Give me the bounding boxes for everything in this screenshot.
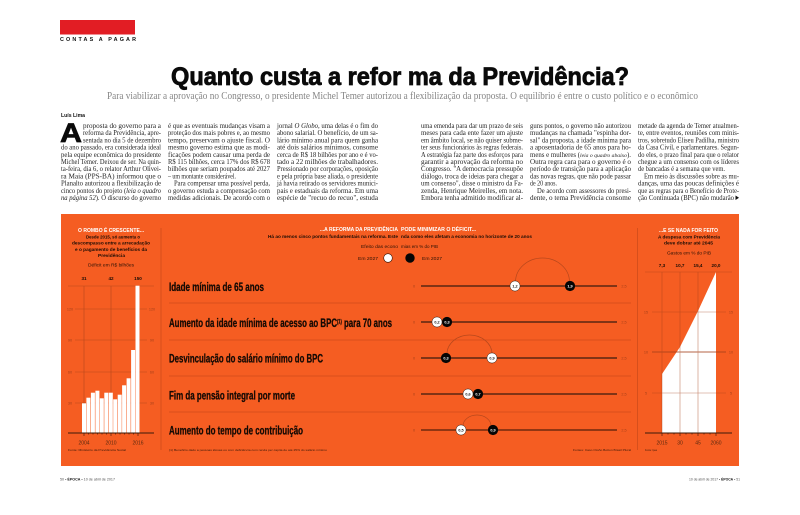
text column 4: garantir a aprovação da reforma no	[421, 159, 524, 166]
text column 5: De acordo com assessores do presi-	[537, 188, 632, 195]
spending heading: ...E SE NADA FOR FEITO	[659, 228, 718, 234]
deficit heading: Déficit em R$ bilhões	[88, 262, 135, 267]
row: BPC idade: 0	[413, 320, 415, 324]
deficit axis numbers: 90	[68, 338, 72, 342]
deficit year labels: 2016	[132, 440, 144, 446]
spending axis numbers	[644, 310, 733, 396]
spending value labels: 20,0	[712, 263, 721, 268]
spending axis numbers: 15	[644, 310, 648, 314]
text column 5: das novas regras, que não pode passar	[530, 173, 632, 180]
spending source: Fonte: Ipea	[645, 448, 657, 452]
row: pensão: 2,5	[621, 392, 627, 396]
text column 2: mesmo governo estima que as modi-	[168, 145, 271, 152]
panel: reform heading	[268, 225, 532, 249]
deficit year labels: 2010	[105, 440, 117, 446]
deficit axis numbers: 120	[149, 308, 155, 312]
text column 2	[167, 123, 271, 202]
text column 1: do ano passado, era considerada ideal	[61, 145, 161, 152]
spending heading: Gastos em % do PIB	[667, 250, 711, 255]
row: contribuição: 2,5	[621, 428, 627, 432]
text column 5: período de transição para a aplicação	[530, 166, 632, 173]
row: desvinculação	[169, 335, 627, 366]
spending year labels	[656, 440, 722, 446]
panel: reform heading: ...A REFORMA DA PREVIDÊNCIA	[320, 225, 398, 233]
row: pensão: 0,6	[465, 392, 471, 396]
row: BPC idade: 0,2	[434, 320, 440, 324]
title: Quanto custa a refor ma da Previdência?	[171, 63, 629, 91]
text column 6: do eles, o prazo final para que o relator	[638, 152, 740, 159]
deficit heading: descompasso entre a arrecadação	[72, 240, 150, 246]
text column 3: jornal O Globo, uma delas é o fim do	[276, 123, 379, 130]
text column 5	[530, 123, 632, 202]
row: pensão	[169, 388, 627, 402]
row: contribuição: 0,9	[490, 428, 496, 432]
text column 5: mudanças na chamada "espinha dor-	[530, 130, 632, 137]
panel: reform heading: Há ao menos cinco pontos fundamentais na reforma. Este	[268, 234, 398, 239]
row: desvinculação: 0,3	[443, 356, 449, 360]
text column 6: que as regras para o Benefício de Prote-	[638, 188, 740, 195]
spending value labels	[659, 263, 721, 268]
text column 1: reforma da Previdência, apre-	[83, 130, 162, 137]
text column 4: ter seus funcionários às regras federais.	[421, 145, 523, 152]
deficit grid	[68, 286, 154, 433]
text column 3: tado a 22 milhões de trabalhadores.	[277, 159, 378, 166]
panel: reform heading: nda como eles afetam a economia no horizonte de 20 anos	[401, 234, 532, 239]
spending year labels: 30	[677, 440, 683, 446]
text column 4: em âmbito local, se não quiser subme-	[421, 137, 524, 144]
text column 5: a aposentadoria de 65 anos para ho-	[530, 145, 632, 152]
spending axis numbers: 10	[644, 350, 648, 354]
text column 4: diálogo, troca de ideias para chegar a	[421, 173, 523, 180]
text column 1: proposta do governo para a	[83, 123, 161, 130]
text column 3	[276, 123, 379, 202]
text column 2: o governo estuda a compensação com	[168, 188, 271, 195]
footer right: 10 de abril de 2017 • ÉPOCA • 51	[689, 476, 741, 482]
spending axis numbers: 5	[730, 392, 732, 396]
text column 2: é que as eventuais mudanças visam a	[168, 123, 270, 130]
text column 5: sal" da proposta, a idade mínima para	[530, 137, 631, 144]
deficit year labels	[78, 440, 144, 446]
row: BPC idade: 2,5	[621, 320, 627, 324]
text column 6: te, entre eventos, reuniões com minis-	[638, 130, 740, 137]
subtitle: Para viabilizar a aprovação no Congresso, o presidente Michel Temer autorizou a flexibilização da proposta. O equilíbrio é entre o custo político e o econômico	[107, 91, 698, 102]
row: idade mínima: 1,2	[512, 284, 518, 288]
spending year labels: 45	[695, 440, 701, 446]
row separators	[169, 303, 631, 412]
text column 2: bilhões que seriam poupados até 2027	[168, 166, 271, 173]
text column 2: medidas adicionais. De acordo com o	[168, 195, 271, 202]
row: contribuição: 0,5	[458, 428, 464, 432]
spending axis numbers: 5	[645, 392, 647, 396]
text column 2: proteção dos mais pobres e, ao mesmo	[168, 130, 271, 137]
panel: deficit chart	[67, 226, 155, 452]
deficit baseline and ticks	[68, 433, 154, 436]
panel: reform heading: PODE MINIMIZAR O DÉFICIT...	[401, 225, 477, 233]
text column 4: zenda, Henrique Meirelles, em nota.	[421, 188, 523, 195]
row: contribuição: Aumento do tempo de contribuição	[169, 424, 303, 438]
row: BPC idade: 0,3	[444, 320, 450, 324]
footnote: (1) Benefício dado a pessoas idosas ou com deficiência com renda per capita de até 25% do salário mínimo	[169, 448, 327, 452]
text column 6: tros, sobretudo Eliseu Padilha, ministro	[638, 137, 740, 144]
deficit axis numbers: 60	[68, 370, 72, 374]
deficit axis numbers: 120	[67, 308, 73, 312]
text column 6: chegue a um consenso com os líderes	[638, 159, 739, 166]
spending year labels: 2060	[710, 440, 722, 446]
row: BPC idade: para 70 anos	[342, 316, 392, 330]
row: desvinculação: 0,9	[489, 356, 495, 360]
text column 5: guns pontos, o governo não autorizou	[530, 123, 632, 130]
panel: reform heading: Efeito das econo	[361, 244, 399, 249]
text column 3: já havia retirado os servidores munici-	[276, 181, 379, 188]
spending axis numbers: 10	[729, 350, 733, 354]
deficit source: Fonte: Ministério da Previdência Social	[68, 448, 126, 452]
row: BPC idade: (1)	[337, 320, 342, 326]
spending year labels: 2015	[656, 440, 668, 446]
text column 2: tempo, preservam o ajuste fiscal. O	[168, 137, 270, 144]
spending grid	[645, 272, 732, 433]
text column 4: meses para cada ente fazer um ajuste	[421, 130, 523, 137]
row: BPC idade: Aumento da idade mínima de acesso ao BPC	[169, 316, 426, 330]
text column 3: pais e estaduais da reforma. Em uma	[277, 188, 378, 195]
text column 1: Michel Temer. Deixou de ser. Na quin-	[61, 159, 162, 166]
text column 2: – um montante considerável.	[167, 173, 236, 180]
text column 1: Planalto autorizou a flexibilização de	[61, 181, 161, 188]
spending baseline and ticks	[645, 433, 732, 436]
text column 2: R$ 115 bilhões, cerca 17% dos R$ 678	[168, 159, 271, 166]
section tag: contas a pagar	[60, 20, 136, 43]
spending value labels: 7,3	[659, 263, 666, 268]
row: idade mínima: 2,5	[621, 284, 627, 288]
spending heading: deve dobrar até 2045	[664, 240, 713, 246]
divider right	[636, 228, 638, 450]
text column 4: Congresso. "A democracia pressupõe	[421, 166, 523, 173]
text column 4: uma emenda para dar um prazo de seis	[421, 123, 523, 130]
spending value labels: 10,7	[676, 263, 685, 268]
text column 6: metade da agenda de Temer atualmen-	[638, 123, 740, 130]
deficit axis numbers: 30	[68, 402, 72, 406]
text column 6: ção Continuada (BPC) não mudarão	[638, 195, 735, 202]
text column 6: Em meio às discussões sobre as mu-	[644, 173, 740, 180]
text column 4	[421, 123, 524, 202]
text column 1	[61, 123, 162, 202]
text column 3: e pela própria base aliada, o presidente	[277, 173, 378, 180]
text column 3: Pressionado por corporações, oposição	[277, 166, 379, 173]
text column 1: sentada no dia 5 de dezembro	[83, 137, 162, 144]
text column 3: cerca de R$ 18 bilhões por ano e é vo-	[277, 152, 379, 159]
deficit heading	[72, 226, 150, 267]
footer left: 50 • ÉPOCA • 10 de abril de 2017	[60, 476, 116, 482]
deficit value labels	[81, 276, 142, 281]
panel: orange infographic background	[61, 214, 739, 466]
row: BPC idade	[169, 316, 627, 330]
text column 4: Embora tenha admitido modificar al-	[421, 195, 524, 202]
deficit axis numbers: 30	[150, 402, 154, 406]
text column 3: lário mínimo anual para quem ganha	[277, 137, 378, 144]
text column 1: cinco pontos do projeto (leia o quadro	[61, 188, 162, 195]
text column 3: espécie de "recuo do recuo", estuda	[277, 195, 378, 202]
row: idade mínima	[169, 258, 627, 294]
text column 5: de 20 anos.	[530, 181, 557, 188]
spending heading	[658, 228, 720, 255]
text column 2: Para compensar uma possível perda,	[174, 181, 270, 188]
text column 5: mens e mulheres (leia o quadro abaixo).	[530, 152, 631, 159]
row: pensão: Fim da pensão integral por morte	[169, 388, 295, 402]
deficit value labels: 150	[134, 276, 142, 281]
text column 3: abono salarial. O benefício, de um sa-	[277, 130, 379, 137]
text column 5: Outra regra cara para o governo é o	[530, 159, 632, 166]
text column 2: ficações podem causar uma perda de	[168, 152, 270, 159]
deficit heading: Previdência	[98, 253, 125, 258]
text column 4: A estratégia faz parte dos esforços para	[421, 152, 523, 159]
spending value labels: 15,4	[694, 263, 703, 268]
deficit axis numbers: 90	[150, 338, 154, 342]
spending heading: A despesa com Previdência	[658, 234, 720, 239]
row: pensão: 0	[413, 392, 415, 396]
deficit axis numbers	[67, 308, 155, 406]
divider left	[160, 228, 162, 450]
deficit heading: e o pagamento de benefícios da	[75, 247, 147, 252]
row: idade mínima: 0	[413, 284, 415, 288]
deficit bars	[82, 286, 140, 433]
text column 1: pela equipe econômica do presidente	[61, 152, 161, 159]
deficit value labels: 42	[108, 276, 114, 281]
row: contribuição: 0	[413, 428, 415, 432]
panel: spending chart	[644, 228, 733, 452]
deficit year labels: 2004	[78, 440, 90, 446]
panel: reform heading: mias em % do PIB	[401, 244, 438, 249]
legend: Em 2027	[422, 256, 443, 261]
row: desvinculação: Desvinculação do salário mínimo do BPC	[169, 352, 323, 366]
row: pensão: 0,7	[475, 392, 481, 396]
text column 6: de bancadas é a semana que vem.	[638, 166, 725, 173]
legend	[358, 253, 443, 263]
row: idade mínima: 1,9	[567, 284, 573, 288]
deficit heading: Desde 2015, só aumenta o	[86, 234, 140, 239]
row: desvinculação: 0	[413, 356, 415, 360]
legend: Em 2027	[358, 256, 379, 261]
deficit heading: O ROMBO É CRESCENTE...	[78, 226, 145, 234]
drop cap: A	[60, 118, 82, 148]
row: desvinculação: 2,5	[621, 356, 627, 360]
row: contribuição	[169, 415, 627, 438]
byline: Luís Lima	[61, 113, 85, 119]
text column 3: até dois salários mínimos, consome	[277, 145, 378, 152]
spending axis numbers: 15	[729, 310, 733, 314]
deficit value labels: 31	[81, 276, 87, 281]
source note: Fontes: Caso Otoño Botton Brasil Plural	[573, 448, 631, 452]
deficit axis numbers: 60	[150, 370, 154, 374]
row: idade mínima: Idade mínima de 65 anos	[169, 280, 264, 294]
text column 1: ra Maia (PPS-BA) informou que o	[61, 173, 162, 180]
text column 1: na página 52). O discurso do governo	[61, 195, 162, 202]
text column 5: dente, o tema Previdência consome	[530, 195, 631, 202]
text column 6	[638, 123, 740, 202]
section tag: contas a pagar: CONTAS A PAGAR	[60, 37, 136, 43]
spending area	[662, 272, 716, 433]
text column 6: danças, uma das poucas definições é	[638, 181, 739, 188]
text column 1: ta-feira, dia 6, o relator Arthur Olivei-	[61, 166, 162, 173]
text column 4: um consenso", disse o ministro da Fa-	[421, 181, 524, 188]
text column 6: da Casa Civil, e parlamentares. Segun-	[638, 145, 740, 152]
